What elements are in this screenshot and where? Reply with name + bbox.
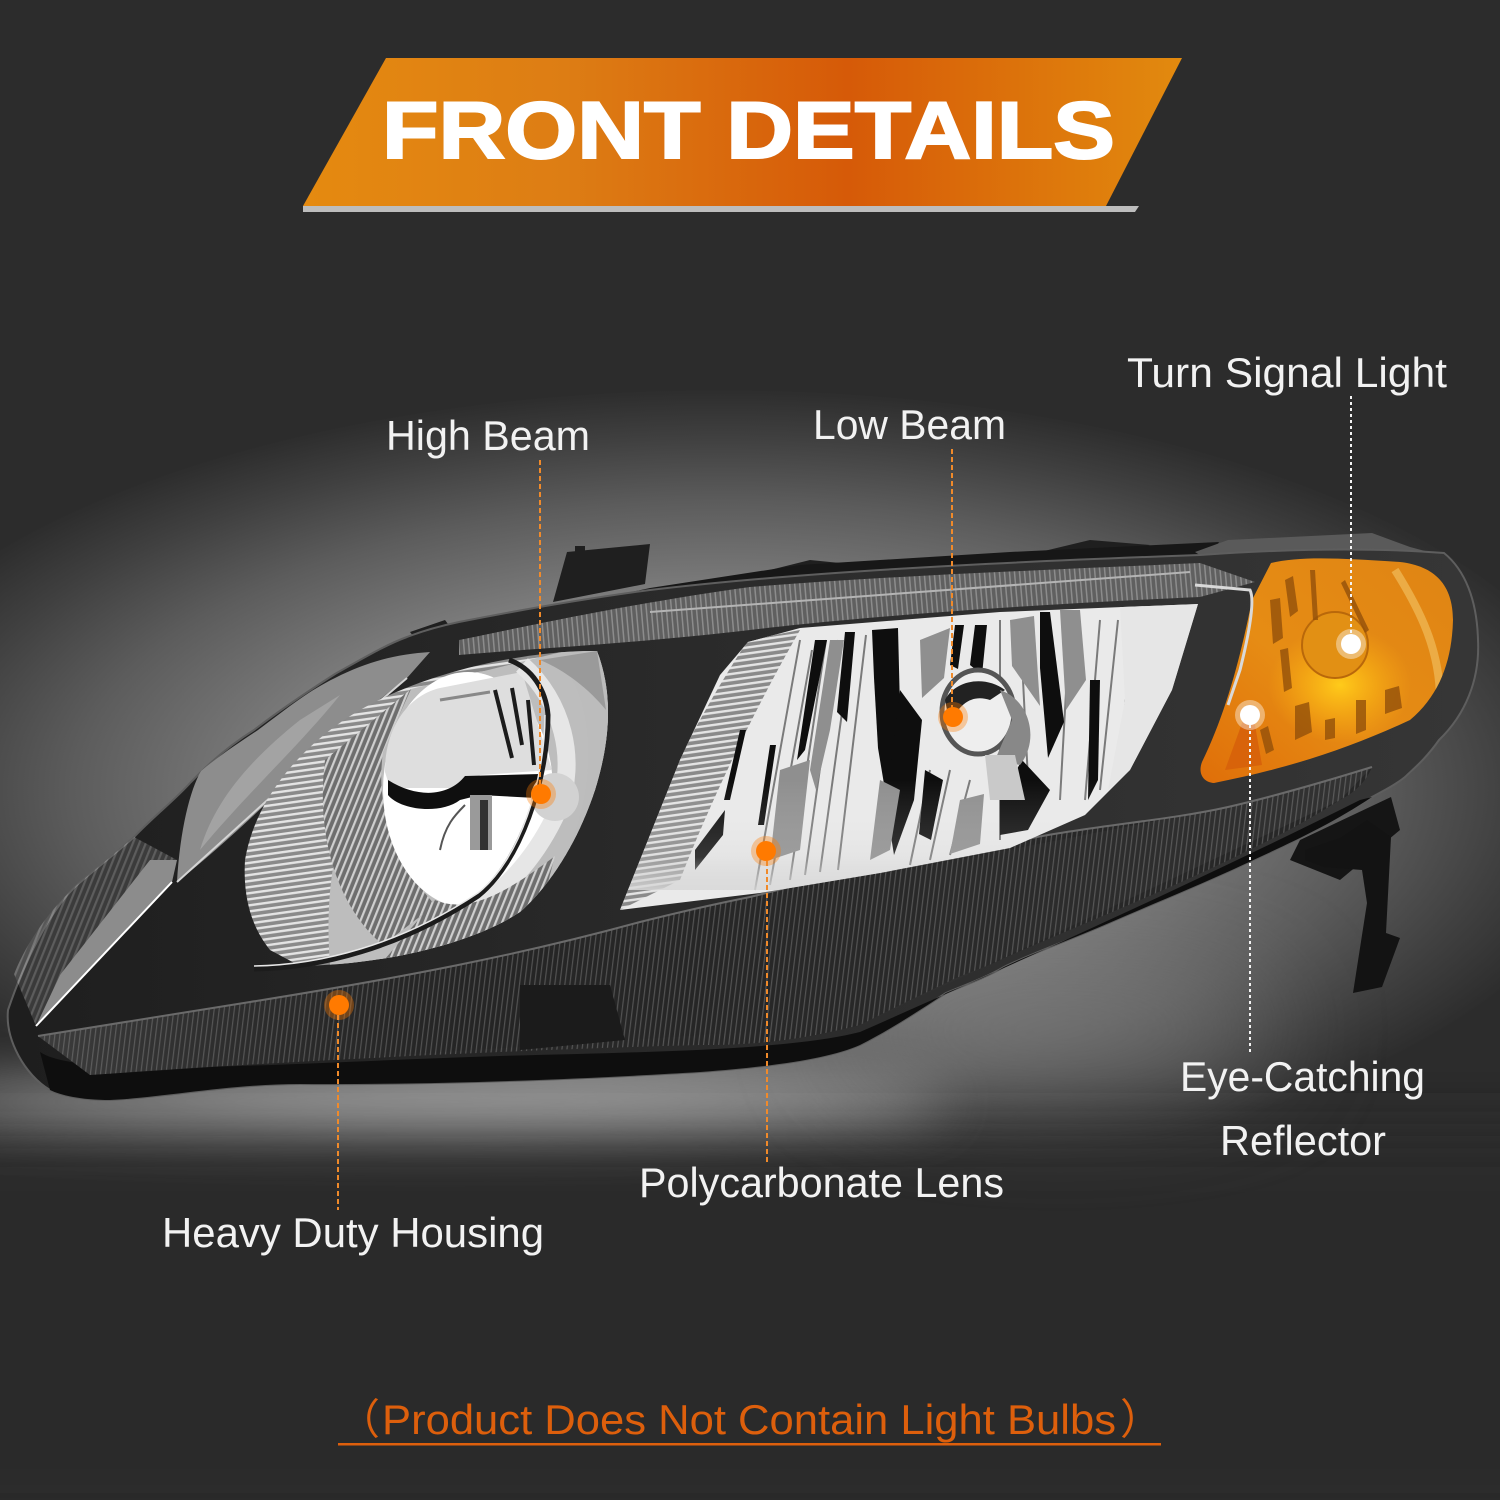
callout: Eye-Catching Reflector xyxy=(1180,700,1425,1164)
lens arc xyxy=(254,660,548,969)
footnote: （ xyxy=(338,1396,380,1443)
low beam bulb xyxy=(942,670,1030,800)
callout: Eye-Catching Reflector: Reflector xyxy=(1220,1117,1386,1164)
callout: Eye-Catching Reflector: Eye-Catching xyxy=(1180,1053,1425,1100)
footnote: ） xyxy=(1120,1396,1162,1443)
callout: Polycarbonate Lens: Polycarbonate Lens xyxy=(639,1159,1004,1206)
callout: Heavy Duty Housing: Heavy Duty Housing xyxy=(162,1209,544,1256)
headlight xyxy=(8,533,1478,1100)
rear mount xyxy=(1290,797,1400,880)
callout: Turn Signal Light xyxy=(1127,349,1447,659)
callout: Low Beam: Low Beam xyxy=(813,401,1006,448)
lower ribbed strip xyxy=(38,767,1372,1075)
footnote: Product Does Not Contain Light Bulbs xyxy=(382,1396,1116,1443)
chrome lip beside amber xyxy=(1195,585,1252,705)
amber turn signal xyxy=(1200,558,1453,783)
top edge clips and tabs xyxy=(410,533,1440,645)
mounting bracket xyxy=(1305,820,1400,993)
callout: Heavy Duty Housing xyxy=(162,990,544,1256)
callout: Polycarbonate Lens xyxy=(639,836,1004,1206)
callout: Turn Signal Light: Turn Signal Light xyxy=(1127,349,1447,396)
clear lens tip ribs xyxy=(14,837,177,1026)
title banner xyxy=(303,58,1182,212)
clear lens tip panel xyxy=(36,860,177,1026)
bottom dark lip xyxy=(40,797,1372,1100)
housing body xyxy=(8,549,1478,1100)
low beam reflector xyxy=(610,600,1210,920)
title banner: FRONT DETAILS xyxy=(382,86,1115,176)
clear lens corner xyxy=(177,652,430,882)
high beam reflector xyxy=(244,651,608,966)
strip highlight xyxy=(38,767,1372,1036)
callout: High Beam: High Beam xyxy=(386,412,590,459)
callout: High Beam xyxy=(386,412,590,809)
callout: Low Beam xyxy=(813,401,1006,732)
top lens rim xyxy=(459,563,1255,655)
